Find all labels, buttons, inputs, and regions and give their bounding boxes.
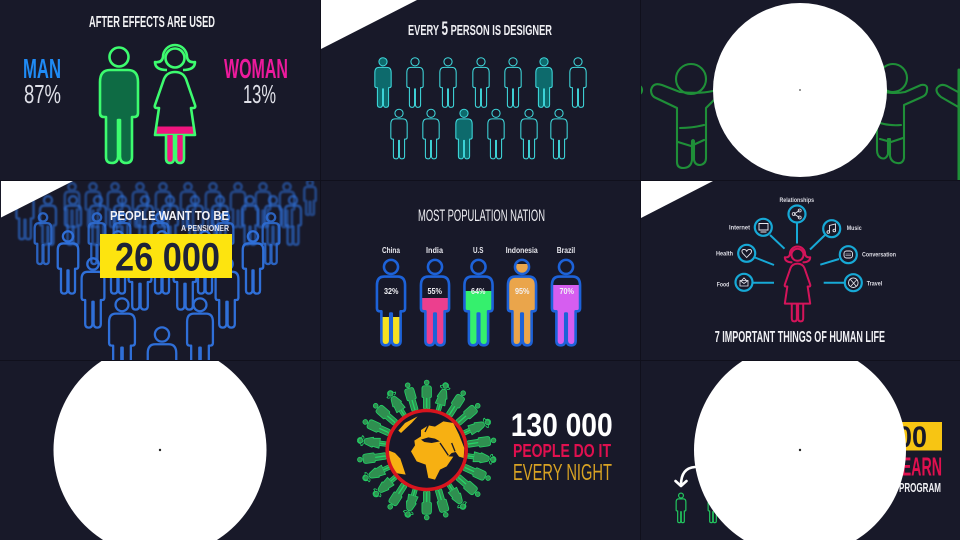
column: India: India [426,245,443,255]
yellow number box [100,234,232,278]
number: 26 000: 26 000 [115,236,220,280]
globe red ring [387,410,466,490]
node: internet [729,219,772,236]
column: Indonesia: Indonesia [506,245,538,255]
ring of people [357,380,497,520]
column: Brazil: Brazil [557,245,575,255]
center dot [799,449,801,451]
column: India [421,245,449,345]
panel: 130 000 people do it every night [357,380,613,520]
heading: people want to be: PEOPLE WANT TO BE [110,208,229,223]
node: health [716,245,755,262]
column: Indonesia [506,245,538,345]
column: U.S [464,245,493,345]
panel: most population nation [377,206,580,345]
value: woman percent: 13% [243,79,276,109]
figure: woman [155,45,195,163]
subheading: a pensioner: A PENSIONER [181,224,229,233]
panel: every 5 person is designer [321,0,586,159]
heading: after effects: AFTER EFFECTS ARE USED [89,14,215,31]
figure: woman in crimson [785,246,810,321]
text: every night: EVERY NIGHT [513,459,612,485]
node: travel [845,274,882,291]
green person 2 [708,502,717,524]
green figures [632,64,960,180]
node: music [823,220,862,237]
node: relationships: Relationships [780,197,814,204]
column: Indonesia: 95% [515,286,530,296]
corner triangle [321,0,417,49]
heading: most population: MOST POPULATION NATION [418,206,545,225]
node: relationships [780,197,814,222]
corner triangle [0,181,73,218]
column: Brazil: 70% [560,286,574,296]
center dot [799,89,801,91]
node: health: Health [716,250,733,257]
panel: 7 important things of human life [641,181,896,346]
column: India: 55% [428,286,442,296]
node: food [717,274,752,291]
column: China: China [382,245,400,255]
column: U.S: 64% [471,286,486,296]
figure: man [100,48,138,163]
column: Brazil [552,245,580,345]
node: internet: Internet [729,224,751,231]
number fragment: 00 [897,421,927,454]
column: China: 32% [384,286,399,296]
node: conversation [840,246,896,263]
panel: learn program with circle reveal [676,344,942,540]
center dot [159,449,161,451]
value: man percent: 87% [24,79,61,109]
spokes [753,223,844,283]
curved arrow [676,467,695,486]
panel: people want to be a pensioner [1,181,318,360]
label: woman: WOMAN [224,53,288,84]
label: man: MAN [23,53,61,84]
node: travel: Travel [867,280,882,287]
node: conversation: Conversation [862,251,896,258]
panel: white transition circle [54,344,266,540]
crowd of blue people [14,181,318,360]
yellow number box [902,422,942,450]
panel: green figures behind white circle [632,3,960,180]
node: music: Music [847,225,862,232]
people grid [375,58,586,159]
green person 1 [676,493,686,523]
white circle [54,344,266,540]
node: food: Food [717,282,729,289]
number: 130 000: 130 000 [511,407,613,443]
column: China [377,245,405,345]
white circle [694,344,906,540]
globe [389,416,464,480]
text: people do it: PEOPLE DO IT [513,441,611,461]
corner triangle [641,181,713,218]
white transition circle [713,3,887,177]
column: U.S: U.S [473,245,484,255]
heading: every 5 person: EVERY 5 PERSON IS DESIGNER [408,19,552,40]
panel: after effects man vs woman [23,14,288,163]
